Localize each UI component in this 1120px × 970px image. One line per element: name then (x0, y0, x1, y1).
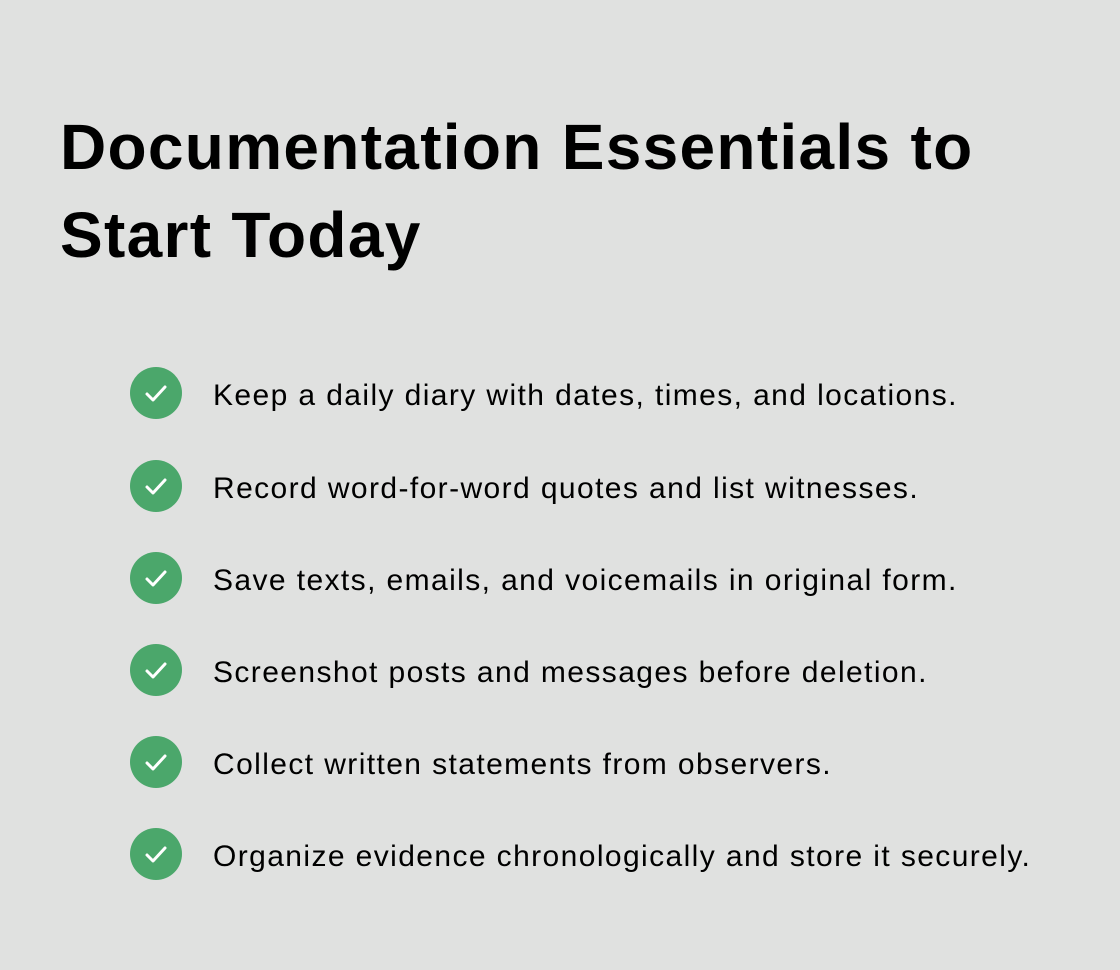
text: Organize evidence chronologically and store it securely. (213, 840, 1031, 873)
item 5 (130, 736, 832, 788)
text: Save texts, emails, and voicemails in original form. (213, 564, 958, 597)
item 6 (130, 828, 1031, 880)
title: Documentation Essentials to (60, 111, 973, 183)
icon: check (130, 460, 182, 512)
text: Collect written statements from observers. (213, 748, 832, 781)
icon: check (130, 367, 182, 419)
item 2 (130, 460, 919, 512)
icon: check (130, 552, 182, 604)
icon: check (130, 736, 182, 788)
item 1 (130, 367, 958, 419)
title (60, 111, 973, 271)
text: Screenshot posts and messages before deletion. (213, 656, 928, 689)
icon: check (130, 828, 182, 880)
title: Start Today (60, 199, 422, 271)
icon: check (130, 644, 182, 696)
item 3 (130, 552, 958, 604)
text: Keep a daily diary with dates, times, and locations. (213, 379, 958, 412)
text: Record word-for-word quotes and list witnesses. (213, 472, 919, 505)
item 4 (130, 644, 928, 696)
